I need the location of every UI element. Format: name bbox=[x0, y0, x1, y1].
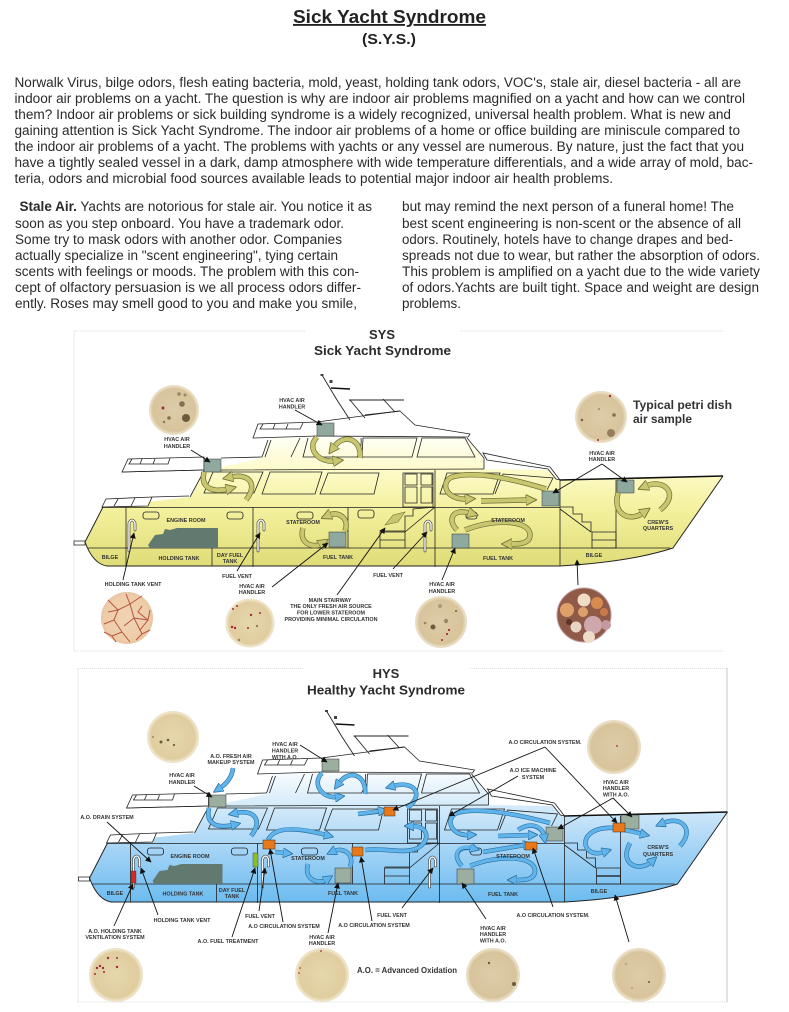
callout: forward HVAC air handler with A.O.: WITH A.O. bbox=[603, 792, 630, 798]
petri dish: upper left bbox=[147, 711, 199, 763]
title bbox=[293, 6, 486, 48]
heading: HYS: Healthy Yacht Syndrome bbox=[307, 682, 465, 698]
left column text: scents with feelings or moods. The problem with this con- bbox=[15, 264, 359, 279]
petri dish: lower left bbox=[89, 948, 143, 1002]
callout: lower HVAC air handler: HANDLER bbox=[429, 589, 455, 595]
callout: holding tank vent bbox=[105, 533, 162, 588]
compartment labels: CREW'S bbox=[647, 845, 669, 851]
legend: typical petri dish: Typical petri dish bbox=[633, 398, 732, 412]
callout: lower HVAC air handler with A.O.: HANDLER bbox=[480, 932, 506, 938]
callout: A.O. holding tank ventilation system bbox=[85, 884, 145, 941]
petri dish: upper left bbox=[149, 385, 199, 435]
petri dish: lower middle bbox=[226, 598, 274, 648]
compartment labels: TANK bbox=[223, 559, 237, 565]
callout: top HVAC air handler with A.O.: WITH A.O. bbox=[272, 755, 299, 761]
compartment labels: STATEROOM bbox=[286, 520, 320, 526]
left column text: cept of olfactory persuasion is we all process odors differ- bbox=[15, 280, 361, 295]
callout: A.O. fresh air makeup system bbox=[208, 754, 255, 766]
callout: fuel vent bbox=[222, 533, 260, 580]
callout: A.O circulation system middle bbox=[338, 857, 410, 929]
intro paragraph: have a tightly sealed vessel in a dark, damp atmosphere with wide temperature differentials, and a wide array of mold, bac- bbox=[14, 155, 753, 170]
compartment labels: ENGINE ROOM bbox=[171, 854, 210, 860]
callout: lower HVAC air handler: HVAC AIR bbox=[429, 582, 455, 588]
petri dish: veined bbox=[101, 592, 153, 644]
callout: top HVAC air handler with A.O.: HVAC AIR bbox=[272, 742, 298, 748]
heading: HYS bbox=[307, 666, 465, 698]
legend: A.O. = Advanced Oxidation: A.O. = Advanced Oxidation bbox=[357, 965, 457, 975]
compartment labels: HOLDING TANK bbox=[163, 892, 204, 898]
callout: main stairway: MAIN STAIRWAY bbox=[309, 598, 352, 604]
callout: stateroom HVAC air handler: HANDLER bbox=[309, 941, 335, 947]
heading: SYS: Sick Yacht Syndrome bbox=[314, 343, 451, 358]
callout: aft HVAC air handler: HVAC AIR bbox=[169, 773, 195, 779]
callout: A.O circulation system left bbox=[248, 849, 320, 930]
callout: forward HVAC air handler with A.O. bbox=[558, 780, 632, 829]
compartment labels: CREW'S bbox=[647, 520, 669, 526]
right column text: odors. Routinely, hotels have to change drapes and bed- bbox=[402, 232, 733, 247]
callout: stateroom HVAC air handler bbox=[239, 543, 328, 596]
yacht cross-section blue bbox=[78, 710, 728, 903]
air handlers bbox=[209, 759, 639, 884]
callout: top HVAC air handler with A.O. bbox=[272, 742, 327, 762]
callout: A.O ice machine system bbox=[449, 768, 557, 816]
left column text: Stale Air. Yachts are notorious for stale air. You notice it as bbox=[20, 199, 372, 214]
callout: top HVAC air handler: HVAC AIR bbox=[279, 398, 305, 404]
callout: forward HVAC air handlers bbox=[553, 451, 627, 493]
compartment labels: BILGE bbox=[586, 553, 603, 559]
heading: HYS: HYS bbox=[373, 666, 400, 681]
intro paragraph: them? Indoor air problems or sick building syndrome is a widely recognized, universal health problem. What is new and bbox=[14, 107, 731, 122]
legend: typical petri dish: air sample bbox=[633, 412, 692, 426]
petri dish: lower right bbox=[415, 596, 467, 648]
callout: A.O circulation system left: A.O CIRCULATION SYSTEM bbox=[248, 924, 320, 930]
callout: holding tank vent: HOLDING TANK VENT bbox=[154, 918, 211, 924]
callout: forward HVAC air handlers: HVAC AIR bbox=[589, 451, 615, 457]
callout: fuel vent bbox=[245, 868, 276, 920]
A.O. units bbox=[131, 807, 625, 883]
callout: A.O. fresh air makeup system: MAKEUP SYSTEM bbox=[208, 760, 255, 766]
callout: fuel vent: FUEL VENT bbox=[245, 914, 276, 920]
callout: second fuel vent: FUEL VENT bbox=[373, 573, 404, 579]
callout: A.O circulation system top bbox=[393, 740, 617, 823]
compartment labels: STATEROOM bbox=[491, 518, 525, 524]
intro paragraph: the indoor air problems of a yacht. The problems with yachts or any vessel are numerous. By nature, just the fact that you bbox=[14, 139, 744, 154]
heading: SYS: SYS bbox=[369, 327, 395, 342]
compartment labels: TANK bbox=[225, 894, 239, 900]
callout: aft HVAC air handler bbox=[169, 773, 212, 797]
compartment labels: HOLDING TANK bbox=[159, 556, 200, 562]
callout: A.O ice machine system: SYSTEM bbox=[522, 775, 545, 781]
callout: stateroom HVAC air handler: HVAC AIR bbox=[309, 935, 335, 941]
left column text: ently. Roses may smell good to you and make you smile, bbox=[15, 296, 357, 311]
panel: SYS diagram bbox=[74, 327, 732, 651]
callout: second fuel vent bbox=[373, 532, 427, 579]
compartment labels: QUARTERS bbox=[643, 526, 674, 532]
callout: stateroom HVAC air handler: HVAC AIR bbox=[239, 584, 265, 590]
intro paragraph bbox=[14, 75, 753, 186]
petri dish: bilge mold bbox=[557, 588, 611, 643]
callout: lower HVAC air handler with A.O.: WITH A.O. bbox=[480, 938, 507, 944]
callout: A.O. fuel treatment: A.O. FUEL TREATMENT bbox=[198, 939, 259, 945]
compartment labels bbox=[107, 845, 674, 900]
intro paragraph: teria, odors and microbial food sources available leads to potential major indoor air health problems. bbox=[14, 171, 613, 186]
callout: holding tank vent: HOLDING TANK VENT bbox=[105, 582, 162, 588]
callout: A.O circulation system right bbox=[517, 848, 590, 919]
left column text bbox=[15, 199, 372, 311]
callout: aft HVAC air handler bbox=[164, 437, 210, 462]
title: (S.Y.S.) bbox=[362, 31, 416, 48]
callout: second fuel vent: FUEL VENT bbox=[377, 913, 408, 919]
compartment labels: FUEL TANK bbox=[483, 556, 513, 562]
callout: forward HVAC air handler with A.O.: HANDLER bbox=[603, 786, 629, 792]
callout: aft HVAC air handler: HANDLER bbox=[169, 780, 195, 786]
callout: stateroom HVAC air handler bbox=[309, 883, 338, 947]
right column text: This problem is amplified on a yacht due to the wide variety bbox=[402, 264, 760, 279]
callout: top HVAC air handler bbox=[279, 398, 322, 425]
petri dish: upper right bbox=[587, 720, 641, 774]
callout: main stairway: PROVIDING MINIMAL CIRCULATION bbox=[285, 617, 378, 623]
callout: lower HVAC air handler bbox=[429, 548, 455, 595]
callout: A.O circulation system middle: A.O CIRCULATION SYSTEM bbox=[338, 923, 410, 929]
callout: A.O circulation system right: A.O CIRCULATION SYSTEM. bbox=[517, 913, 590, 919]
callout: A.O. drain system bbox=[80, 815, 151, 862]
intro paragraph: Norwalk Virus, bilge odors, flesh eating bacteria, mold, yeast, holding tank odors, VOC's, stale air, diesel bacteria - all are bbox=[14, 75, 741, 90]
callout: main stairway bbox=[285, 528, 385, 623]
right column text: but may remind the next person of a funeral home! The bbox=[402, 199, 734, 214]
callout: holding tank vent bbox=[141, 868, 211, 924]
callout: A.O ice machine system: A.O ICE MACHINE bbox=[510, 768, 557, 774]
callout: lower HVAC air handler with A.O.: HVAC AIR bbox=[480, 926, 506, 932]
callout: A.O. holding tank ventilation system: VENTILATION SYSTEM bbox=[85, 935, 145, 941]
left column text: Some try to mask odors with another odor. Companies bbox=[15, 232, 342, 247]
compartment labels: STATEROOM bbox=[496, 854, 530, 860]
callout: main stairway: THE ONLY FRESH AIR SOURCE bbox=[290, 604, 372, 610]
compartment labels bbox=[102, 518, 674, 565]
petri dish: lower right one bbox=[466, 948, 520, 1002]
compartment labels: QUARTERS bbox=[643, 852, 674, 858]
callout: main stairway: FOR LOWER STATEROOM bbox=[297, 610, 366, 616]
air flow arrows yellow bbox=[203, 437, 669, 546]
callout: fuel vent: FUEL VENT bbox=[222, 574, 253, 580]
compartment labels: BILGE bbox=[107, 891, 124, 897]
callout: A.O. drain system: A.O. DRAIN SYSTEM bbox=[80, 815, 134, 821]
petri dish: lower middle bbox=[295, 948, 349, 1002]
callout: stateroom HVAC air handler: HANDLER bbox=[239, 590, 265, 596]
panel: HYS diagram bbox=[78, 666, 728, 1002]
yacht cross-section yellow bbox=[74, 374, 723, 567]
callout: A.O. fresh air makeup system: A.O. FRESH AIR bbox=[210, 754, 252, 760]
callout: A.O circulation system top: A.O CIRCULATION SYSTEM. bbox=[509, 740, 582, 746]
callout: top HVAC air handler with A.O.: HANDLER bbox=[272, 748, 298, 754]
right column text: spreads not due to wear, but rather the absorption of odors. bbox=[402, 248, 760, 263]
left column text: soon as you step onboard. You have a trademark odor. bbox=[15, 216, 344, 231]
callout: A.O. holding tank ventilation system: A.O. HOLDING TANK bbox=[88, 929, 142, 935]
compartment labels: BILGE bbox=[102, 555, 119, 561]
compartment labels: FUEL TANK bbox=[323, 555, 353, 561]
callout: A.O. fuel treatment bbox=[198, 868, 259, 945]
callout: top HVAC air handler: HANDLER bbox=[279, 404, 305, 410]
air flow arrows blue bbox=[208, 768, 687, 882]
compartment labels: STATEROOM bbox=[291, 856, 325, 862]
right column text: best scent engineering is non-scent or the absence of all bbox=[402, 216, 741, 231]
air handlers bbox=[204, 423, 634, 548]
title: Sick Yacht Syndrome bbox=[293, 6, 486, 27]
compartment labels: ENGINE ROOM bbox=[167, 518, 206, 524]
callout: forward HVAC air handlers: HANDLER bbox=[589, 457, 615, 463]
legend: typical petri dish bbox=[633, 398, 732, 426]
intro paragraph: indoor air problems on a yacht. The question is why are indoor air problems magnified on a yacht and how can we control bbox=[14, 91, 745, 106]
petri dish: upper right bbox=[575, 391, 627, 443]
left column text: actually specialize in "scent engineering", tying certain bbox=[15, 248, 338, 263]
callout: aft HVAC air handler: HVAC AIR bbox=[164, 437, 190, 443]
intro paragraph: gaining attention is Sick Yacht Syndrome. The indoor air problems of a home or office building are miniscule compared to bbox=[14, 123, 740, 138]
compartment labels: BILGE bbox=[591, 889, 608, 895]
heading: SYS bbox=[314, 327, 451, 358]
callout: forward HVAC air handler with A.O.: HVAC AIR bbox=[603, 780, 629, 786]
compartment labels: DAY FUEL bbox=[219, 888, 246, 894]
compartment labels: FUEL TANK bbox=[328, 891, 358, 897]
callout: aft HVAC air handler: HANDLER bbox=[164, 444, 190, 450]
callout: lower HVAC air handler with A.O. bbox=[462, 883, 507, 944]
arrow: bilge sample bbox=[615, 895, 629, 942]
right column text: problems. bbox=[402, 296, 461, 311]
compartment labels: DAY FUEL bbox=[217, 553, 244, 559]
right column text bbox=[402, 199, 760, 311]
callout: second fuel vent bbox=[377, 868, 433, 919]
compartment labels: FUEL TANK bbox=[488, 892, 518, 898]
arrow: bilge sample bbox=[577, 560, 578, 585]
petri dish: lower right two bbox=[612, 948, 666, 1002]
right column text: of odors.Yachts are built tight. Space and weight are design bbox=[402, 280, 759, 295]
